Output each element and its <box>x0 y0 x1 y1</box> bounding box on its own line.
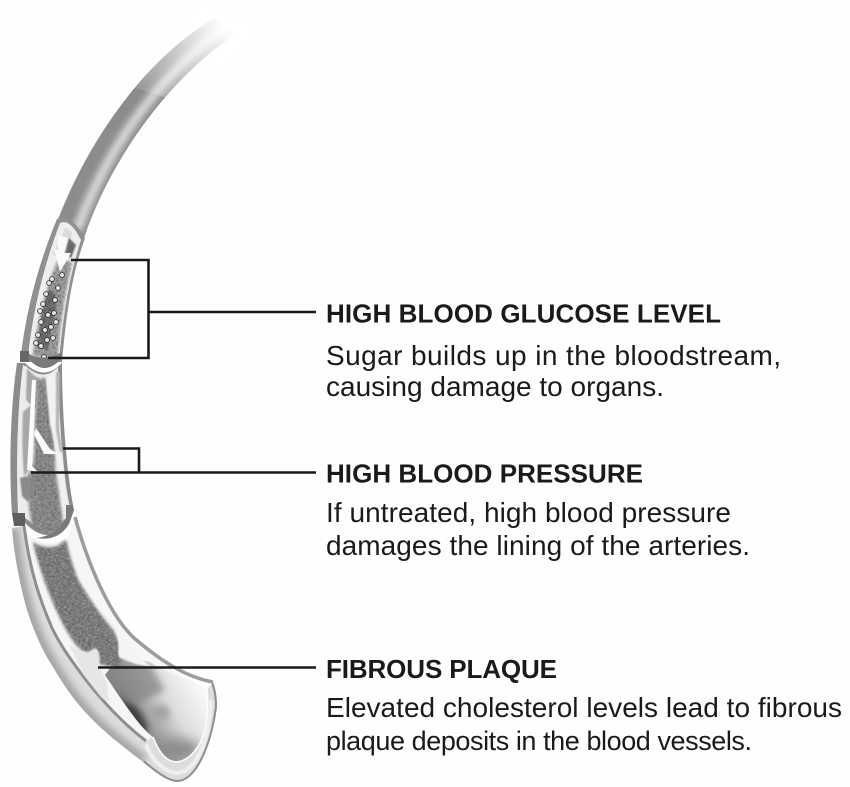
text block: high blood glucose level <box>326 298 781 402</box>
text block: high blood pressure <box>326 458 750 561</box>
leader lines: high blood glucose level <box>48 260 316 358</box>
description: plaque: Elevated cholesterol levels lead to fibrous <box>326 692 842 723</box>
heading: high blood glucose level: HIGH BLOOD GLUCOSE LEVEL <box>326 298 721 328</box>
description: pressure <box>326 497 750 561</box>
leader lines: high blood pressure <box>31 448 316 472</box>
description: glucose: causing damage to organs. <box>326 371 664 402</box>
description: glucose: Sugar builds up in the bloodstream, <box>326 340 781 371</box>
description: plaque <box>326 692 842 756</box>
right wall <box>75 517 213 682</box>
description: plaque: plaque deposits in the blood vessels. <box>326 726 752 756</box>
outer wall <box>12 526 217 782</box>
intact upper artery <box>58 21 226 237</box>
description: glucose <box>326 340 781 402</box>
description: pressure: If untreated, high blood pressure <box>326 497 731 528</box>
leader line: fibrous plaque <box>98 666 316 669</box>
heading: high blood pressure: HIGH BLOOD PRESSURE <box>326 458 643 488</box>
section: blood pressure <box>10 363 74 539</box>
fibrous plaque deposit <box>69 645 111 702</box>
blood cells <box>34 273 64 359</box>
section: fibrous plaque <box>12 516 217 782</box>
description: pressure: damages the lining of the arteries. <box>326 530 750 561</box>
cavity and plaque deposits <box>105 655 208 762</box>
illustration: artery cross-section <box>10 21 226 782</box>
heading: fibrous plaque: FIBROUS PLAQUE <box>326 654 557 684</box>
text block: fibrous plaque <box>326 654 842 756</box>
section: glucose in bloodstream <box>20 218 85 368</box>
